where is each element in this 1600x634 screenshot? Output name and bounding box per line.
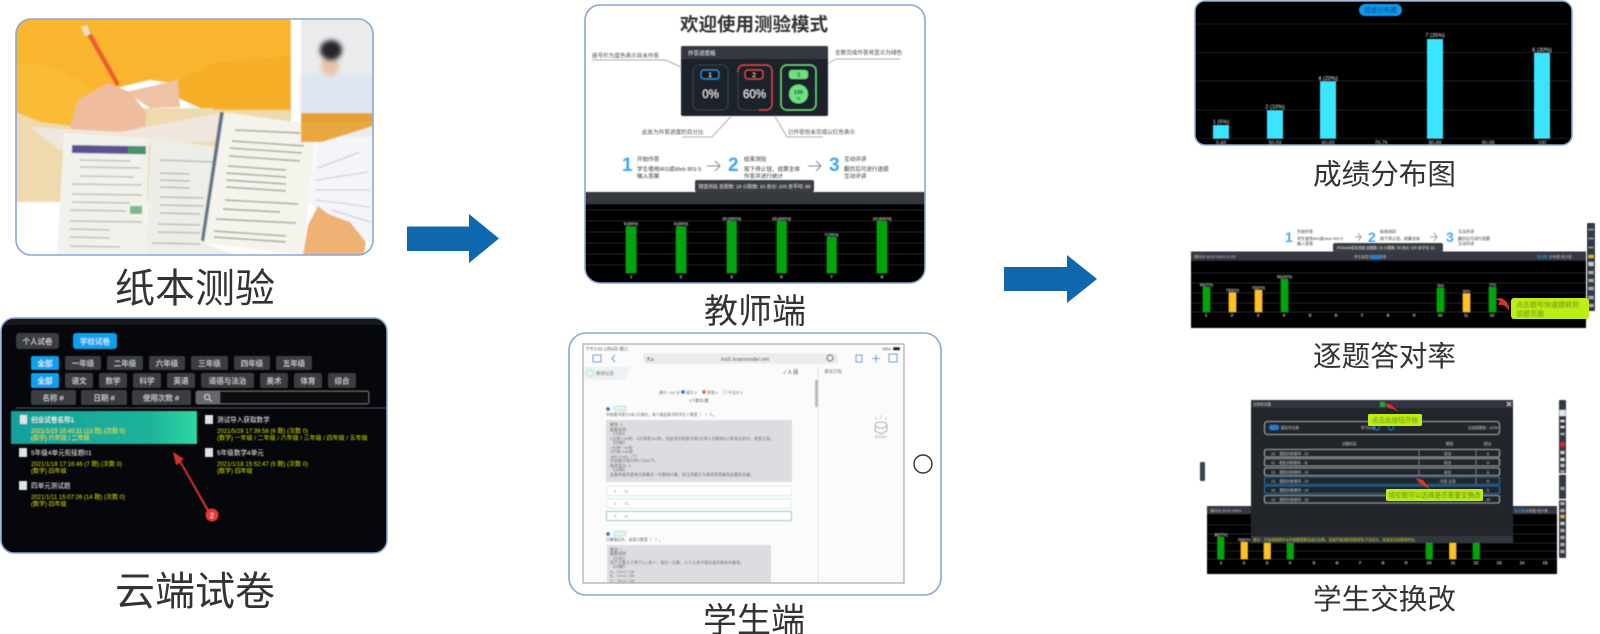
bar chart: teacher: 8 [881, 274, 884, 279]
question 1: 180÷3=60（下） [610, 454, 640, 459]
bar chart: behind modal: 13 [1497, 560, 1502, 565]
grade filter row: 五年级 [283, 358, 306, 368]
paper item: 测试导入获取数学 [217, 415, 270, 424]
progress grid: 1 [708, 72, 712, 79]
question 1: 解答: 3 [610, 421, 623, 427]
bar chart: teacher: 10 (100%) [722, 216, 741, 221]
progress grid: 0% [702, 89, 719, 101]
subject filter row: 全部 [38, 376, 53, 386]
question rows: 填空 [1444, 460, 1452, 465]
bar chart: teacher: 7 [830, 274, 833, 279]
steps: 2 [1368, 229, 1376, 245]
grade filter row: 一年级 [72, 358, 95, 368]
subject filter row: 科学 [140, 376, 155, 386]
lesson tab [583, 367, 630, 380]
grade filter row: 三年级 [198, 358, 221, 368]
steps: 1 [1285, 229, 1293, 245]
toolbar text [1194, 254, 1572, 259]
bar chart: per-question accuracy: 8 [1387, 312, 1390, 318]
bar chart: per-question accuracy: 10 [1438, 312, 1443, 318]
swap modal: 题型 [1446, 441, 1454, 446]
bar chart: per-question accuracy: 1 [1205, 312, 1208, 318]
toolbar text: 分布图 [1525, 508, 1536, 513]
question rows: 6 [1487, 452, 1489, 456]
paper item: 2021/5/28 17:39:58 (6 题) (次数 0) [217, 427, 308, 435]
swap modal: 试题内容 [1342, 441, 1357, 446]
steps: 学生使用IRS或Web IRS 5 [1297, 235, 1344, 241]
steps: 学生使用IRS或Web IRS 5 [637, 165, 701, 173]
bar chart: score distribution: 60-69 [1322, 140, 1335, 146]
paper item: 2021/1/18 15:52:47 (5 题) (次数 0) [217, 460, 308, 468]
question rows [1264, 450, 1500, 503]
sort and search row: 日期 # [93, 394, 115, 402]
paper item: 5年级数学4单元 [217, 448, 264, 457]
steps: 1 [622, 155, 633, 176]
subject filter row: 美术 [266, 376, 282, 386]
steps: 结束测验 [744, 155, 767, 163]
paper item: 2021/1/11 15:07:26 (14 题) (次数 0) [31, 493, 125, 501]
browser bar: 48% [882, 346, 891, 352]
bar chart: behind modal: 12 [1474, 560, 1479, 565]
callout: jump to question [1494, 298, 1589, 319]
arrow: to devices [407, 214, 499, 263]
paper item [205, 448, 308, 475]
swap modal: 学习小组 [1361, 425, 1376, 430]
callout: fill-in question swap: 填空题可以选择是否需要交换改 [1388, 490, 1481, 500]
paper item: 5年级4单元衔接题01 [31, 448, 92, 457]
question 2: 四个大数大于等于5入到十，首位一位数，小于五舍不管后面的那些的都舍。 [610, 559, 744, 565]
panel: score distribution [1195, 1, 1572, 146]
toolbar text: 统计表 [1561, 254, 1572, 259]
tab buttons: 个人试卷 [22, 336, 53, 346]
bar chart: behind modal [1207, 525, 1557, 565]
bar chart: per-question accuracy: 9 [1413, 312, 1416, 318]
progress grid: 3 [797, 72, 801, 79]
question 2: A、19×2＝38 [610, 569, 635, 574]
bar chart: per-question accuracy: 80(77%) [1200, 283, 1213, 287]
question rows: 15. 题型判断题号 - 15 [1271, 497, 1308, 502]
bar chart: behind modal: 14 [1520, 560, 1525, 565]
bar chart: teacher: 3 [730, 274, 733, 279]
panel: student swap marking [1200, 400, 1566, 574]
progress grid [681, 46, 828, 116]
progress grid: 作答进度格 [688, 49, 716, 57]
toolbar: right side [1587, 223, 1595, 311]
progress grid: 100 [794, 90, 803, 96]
summary pill: 随堂测验 总题数: 10 小题数: 10 总分: 100 总平均: 88 [699, 183, 811, 190]
toolbar text: 分布图 [1549, 254, 1560, 259]
question rows: 问答·主观 [1440, 478, 1456, 484]
question 1: 学校图书馆分钟人均60下。 [610, 457, 658, 463]
callout: fill-in question swap [1386, 478, 1483, 501]
bar chart: teacher: 2 [680, 274, 683, 279]
callout texts: 座号栏为蓝色表示尚未作答 [592, 52, 660, 60]
paper item: (数学) 四年级 [31, 467, 67, 475]
toolbar icons: ✓ A 器 [783, 369, 799, 376]
tab buttons: 学校试卷 [80, 336, 110, 346]
bar chart: per-question accuracy: 11 [1464, 312, 1469, 318]
callout lines [592, 59, 900, 137]
question 1: 3分钟=180秒 [610, 448, 633, 454]
sort and search row: 名称 # [42, 392, 64, 402]
question 2: B、19×2＝38 [610, 573, 635, 578]
question 2: C、19×2＝38 [610, 578, 635, 583]
bar chart: score distribution [1213, 33, 1552, 146]
student screen [583, 344, 904, 583]
toolbar text: 答对率 [1514, 508, 1525, 513]
bar chart: score distribution: 6 (30%) [1532, 48, 1552, 54]
grade filter row: 六年级 [156, 358, 179, 368]
question 1: 学校图书馆分3本1元借出，每人租此图书的学生人数是（ ）人。 [606, 412, 717, 417]
bar chart: behind modal: 7 [1359, 560, 1362, 565]
heading: student swap marking: 学生交换改 [1313, 584, 1456, 616]
panel: student tablet [569, 333, 941, 595]
bar chart: per-question accuracy: 5 [1309, 312, 1312, 318]
bar chart: per-question accuracy: 4 [1283, 312, 1286, 318]
bar chart: score distribution: 1 (5%) [1213, 120, 1229, 126]
swap modal: 提示：只支持选择作业开放题型题目进行交换，互相不批改的测验学生下次扫卡，并该次对应批改作业。 [1253, 537, 1418, 542]
paper item [19, 448, 122, 475]
bar chart: per-question accuracy: 12 [1490, 312, 1495, 318]
callout: jump to question: 点击题号快速跳转到 [1516, 300, 1579, 309]
tab buttons [16, 333, 117, 349]
steps: 结束测验 [1380, 228, 1396, 234]
question rows: 6 [1487, 461, 1489, 465]
steps: 作答并进行统计 [744, 172, 784, 180]
arrow: red pointer with badge: 2 [210, 511, 214, 520]
steps [622, 155, 889, 180]
bar chart: per-question accuracy [1191, 273, 1586, 318]
question 1: 1分钟＝60秒 [610, 444, 633, 450]
steps: 3 [829, 155, 840, 176]
bar chart: behind modal: 2 [1243, 560, 1246, 565]
question rows: 12. 题型判断题号 - 12 [1271, 470, 1308, 474]
steps: 翻页后可进行逐题 [844, 165, 889, 173]
question rows: 14. 题型判断题号 - 14 [1271, 488, 1308, 492]
toolbar text: 学生端显示正确答案 [1354, 254, 1387, 259]
question rows: 6 [1487, 480, 1489, 484]
question rows: 6 [1487, 488, 1489, 492]
bar chart: score distribution: 70-79 [1375, 140, 1388, 146]
bar chart: score distribution: 4 (20%) [1318, 76, 1338, 82]
toolbar text: 课时03 30:00 100% [1210, 508, 1242, 513]
question rows: 6 [1487, 470, 1489, 474]
bar chart: per-question accuracy: 76% [1437, 284, 1444, 288]
icon: empty box [875, 415, 887, 439]
bar chart: behind modal: 8 [1382, 560, 1385, 565]
steps: 输入答案 [1297, 240, 1313, 246]
paper item: (数学) 四年级 [217, 467, 253, 475]
bar chart: score distribution: 0-49 [1216, 140, 1226, 146]
selected paper: 创业试卷名称1 [31, 415, 75, 424]
heading: per-question accuracy: 逐题答对率 [1313, 341, 1456, 373]
subject filter row: 语文 [72, 376, 87, 386]
bar chart: teacher: 10 (100%) [772, 216, 791, 221]
answer options: 2 71 [614, 501, 629, 506]
progress grid: 2 [752, 72, 756, 79]
summary pill [695, 180, 814, 192]
bar chart: behind modal: 9 [1405, 560, 1408, 565]
paper item: 四单元测试题 [31, 481, 71, 490]
browser bar [585, 346, 900, 364]
question rows: 11. 题型判断题号 - 11 [1271, 460, 1308, 465]
callout texts: 已作答但未完成以红色表示 [788, 128, 856, 136]
steps: 翻页后可进行逐题 [1458, 235, 1490, 241]
bar chart: behind modal: 80(77%) [1215, 533, 1227, 537]
bar chart: teacher: 10 (100%) [873, 216, 892, 221]
question rows: 填空 [1444, 470, 1452, 474]
selected paper: 2021/1/15 16:40:11 (13 题) (次数 0) [31, 427, 125, 435]
chart band [585, 192, 925, 204]
subject filter row: 道德与法治 [209, 376, 247, 386]
subject filter row: 英语 [174, 376, 189, 386]
legend: 答错 0 [707, 390, 718, 395]
selected paper: (数学) 六年级 / 二年级 [31, 434, 90, 442]
browser bar: 下午3:50 2月6日 週三 [585, 346, 629, 352]
sort and search row: 使用次数 # [143, 392, 180, 402]
question 2: 解答: 1 [610, 546, 623, 552]
bar chart: behind modal: 3 [1266, 560, 1269, 565]
steps: 互动评讲 [1458, 228, 1474, 234]
question rows: 13. 题型判断题号 - 13 [1271, 478, 1308, 484]
steps: 开始作答 [1297, 228, 1313, 234]
legend: 不记分 0 [728, 390, 743, 395]
subject filter row: 综合 [334, 376, 350, 386]
question 2 [606, 531, 771, 583]
toolbar text: 统计表 [1537, 508, 1548, 513]
question 1: 【点睛】 [611, 466, 627, 472]
icon: home button [914, 455, 932, 473]
steps: 按下停止钮，结算全体 [744, 165, 800, 173]
steps: 开始作答 [637, 155, 660, 163]
bar chart: behind modal: 15 [1543, 560, 1548, 565]
answer options [606, 486, 792, 520]
bar chart: per-question accuracy: 7 [1361, 312, 1364, 318]
grade filter row: 四年级 [241, 358, 264, 368]
bar chart: score distribution: 80-89 [1429, 140, 1442, 146]
question 2: 【详解】 [611, 563, 627, 569]
grade filter row: 全部 [38, 358, 53, 368]
swap modal: 题目开交换 [1281, 425, 1299, 430]
paper item: (数学) 一年级 / 二年级 / 六年级 / 三年级 / 四年级 / 五年级 [217, 434, 368, 442]
arrow: red pointer with badge [173, 452, 218, 522]
steps: 互动评讲 [1458, 240, 1474, 246]
bar chart: score distribution: 90-99 [1482, 140, 1495, 146]
question 2: 解题说明 [610, 550, 626, 556]
question 1: 【详解】 [611, 439, 627, 445]
bar chart: behind modal: 11 [1451, 560, 1456, 565]
chart pill [1359, 4, 1402, 16]
arrow: to results [1004, 255, 1097, 303]
toolbar text: 课时03 30:00 100% 12:05 [1194, 254, 1235, 259]
question 1: 【分析】 [611, 430, 627, 436]
subject filter row: 体育 [300, 376, 316, 386]
legend: 满分: 100 分 [659, 390, 680, 395]
question 2: 【分析】 [611, 555, 627, 561]
heading: score distribution: 成绩分布图 [1313, 159, 1456, 191]
answer options: 3 11 [614, 514, 629, 518]
bar chart: per-question accuracy: 3 [1257, 312, 1260, 318]
bar chart: behind modal: 6 [1336, 560, 1339, 565]
browser bar: 大a [646, 356, 654, 363]
steps: 输入答案 [637, 172, 660, 180]
bar chart: per-question accuracy: 90(100%) [1277, 275, 1292, 279]
panel: paper test photo [16, 19, 373, 255]
question rows: 填空 [1444, 451, 1452, 456]
bar chart: behind modal: 5 [1313, 560, 1316, 565]
teacher title: 欢迎使用测验模式 [680, 14, 828, 35]
right toolbar [1559, 400, 1566, 558]
question 1 [606, 406, 792, 482]
paper item [19, 481, 125, 508]
panel: cloud test papers [1, 318, 387, 553]
grade filter row [31, 356, 312, 370]
bar chart: teacher: 7 (70%) [824, 232, 839, 237]
chart pill: 成绩分布图 [1364, 6, 1397, 14]
bar chart: score distribution: 2 (10%) [1265, 104, 1285, 110]
swap modal: 已选择题数： [1468, 425, 1490, 430]
bar chart: per-question accuracy: 6 [1335, 312, 1338, 318]
panel: per-question accuracy [1191, 223, 1595, 328]
bar chart: score distribution: 50-59 [1269, 140, 1282, 146]
question 1: 故答案为: 3 [610, 462, 631, 468]
bar chart: per-question accuracy: 72(67%) [1252, 286, 1265, 290]
bar chart: behind modal: 1 [1220, 560, 1223, 565]
question rows: 10. 题型判断题号 - 10 [1271, 451, 1308, 456]
callout: click to start: 点击此按钮开始 [1372, 416, 1418, 424]
callout texts [592, 48, 903, 136]
bar chart: score distribution: 7 (35%) [1425, 33, 1445, 39]
question 1: 1分钟＝60秒，3分钟是180秒，因此用学校图书馆3分钟人均数除以3等发出的分，就是正答。 [610, 435, 774, 441]
subject filter row [31, 373, 356, 388]
bar chart: per-question accuracy: 2 [1231, 312, 1234, 318]
swap modal [1251, 400, 1513, 543]
bar chart: per-question accuracy: 60% [1463, 290, 1470, 294]
sort and search row [31, 390, 369, 405]
question 1: 解题说明 [610, 426, 626, 432]
green start button [1380, 402, 1385, 407]
bar chart: teacher: 1 [630, 274, 633, 279]
question 1: 此题考查的是单位换算及一位数除计算，除法求解方与乘除等是解答此题的关键。 [610, 471, 754, 477]
heading: cloud test papers: 云端试卷 [115, 570, 275, 614]
legend: 填写 5 [686, 390, 697, 395]
steps: 互动评讲 [844, 172, 867, 180]
steps: 2 [728, 155, 739, 176]
steps: 按下停止钮，结算全体 [1380, 235, 1420, 241]
callout: click to start [1368, 404, 1422, 426]
bar chart: per-question accuracy: 74(60%) [1226, 288, 1239, 292]
legend [659, 390, 743, 403]
steps [1285, 228, 1490, 246]
progress grid: % [796, 96, 801, 101]
bar chart: teacher: 6 [780, 274, 783, 279]
bar chart: teacher: 9 (90%) [674, 221, 689, 226]
subject filter row: 数学 [106, 376, 121, 386]
bar chart: behind modal: 4 [1289, 560, 1292, 565]
student screen: 课堂历程 [824, 368, 842, 375]
answer options: 1 11 [614, 488, 629, 494]
paper item [205, 415, 368, 442]
legend: 3下数学2题 [689, 398, 709, 403]
callout texts: 此处为作答进度的百分比 [642, 128, 704, 136]
bar chart: behind modal: 10 [1427, 560, 1432, 565]
steps: 互动评讲 [844, 155, 867, 163]
bar chart: per-question accuracy: 77% [1489, 283, 1496, 287]
selected paper [11, 411, 197, 444]
grade filter row: 二年级 [114, 358, 137, 368]
toolbar text: 答对率 [1537, 254, 1548, 259]
screen behind modal [1207, 506, 1557, 574]
question 2: 计算图总外，底是大数是（ ）。 [606, 537, 663, 542]
swap modal: 交换改设置 [1253, 402, 1271, 406]
swap modal: 配分 [1484, 441, 1492, 446]
summary pill [1333, 243, 1443, 252]
lesson tab: 教师信息 [596, 370, 614, 377]
swap modal: 12/99 [1489, 426, 1498, 430]
callout texts: 全数完成作答将显示为绿色 [835, 48, 903, 56]
browser bar: ins5.teammodel.net [721, 357, 769, 363]
paper item: 2021/1/18 17:16:46 (7 题) (次数 0) [31, 460, 122, 468]
callout: jump to question: 该题页面 [1516, 309, 1544, 318]
heading: paper test: 纸本测验 [115, 267, 275, 311]
bar chart: score distribution: 100 [1538, 140, 1546, 146]
steps: 3 [1446, 229, 1454, 245]
panel: teacher client [585, 5, 925, 284]
paper item: (数学) 四年级 [31, 500, 67, 508]
bar chart: teacher [585, 210, 925, 279]
bar chart: teacher: 9 (90%) [624, 221, 639, 226]
left mini toolbar [1200, 462, 1205, 481]
question rows: 10 [1486, 498, 1490, 502]
heading: teacher client: 教师端 [704, 293, 806, 331]
summary pill: IRSbank成本测验 总题数: 15 小题数: 15 总分: 100 总平均: 31 [1337, 245, 1435, 250]
progress grid: 60% [743, 89, 766, 101]
bar chart: behind modal: 74(60%) [1238, 538, 1250, 542]
toolbar text [1210, 508, 1548, 513]
icon: empty box: 暂无资料 [875, 434, 887, 439]
